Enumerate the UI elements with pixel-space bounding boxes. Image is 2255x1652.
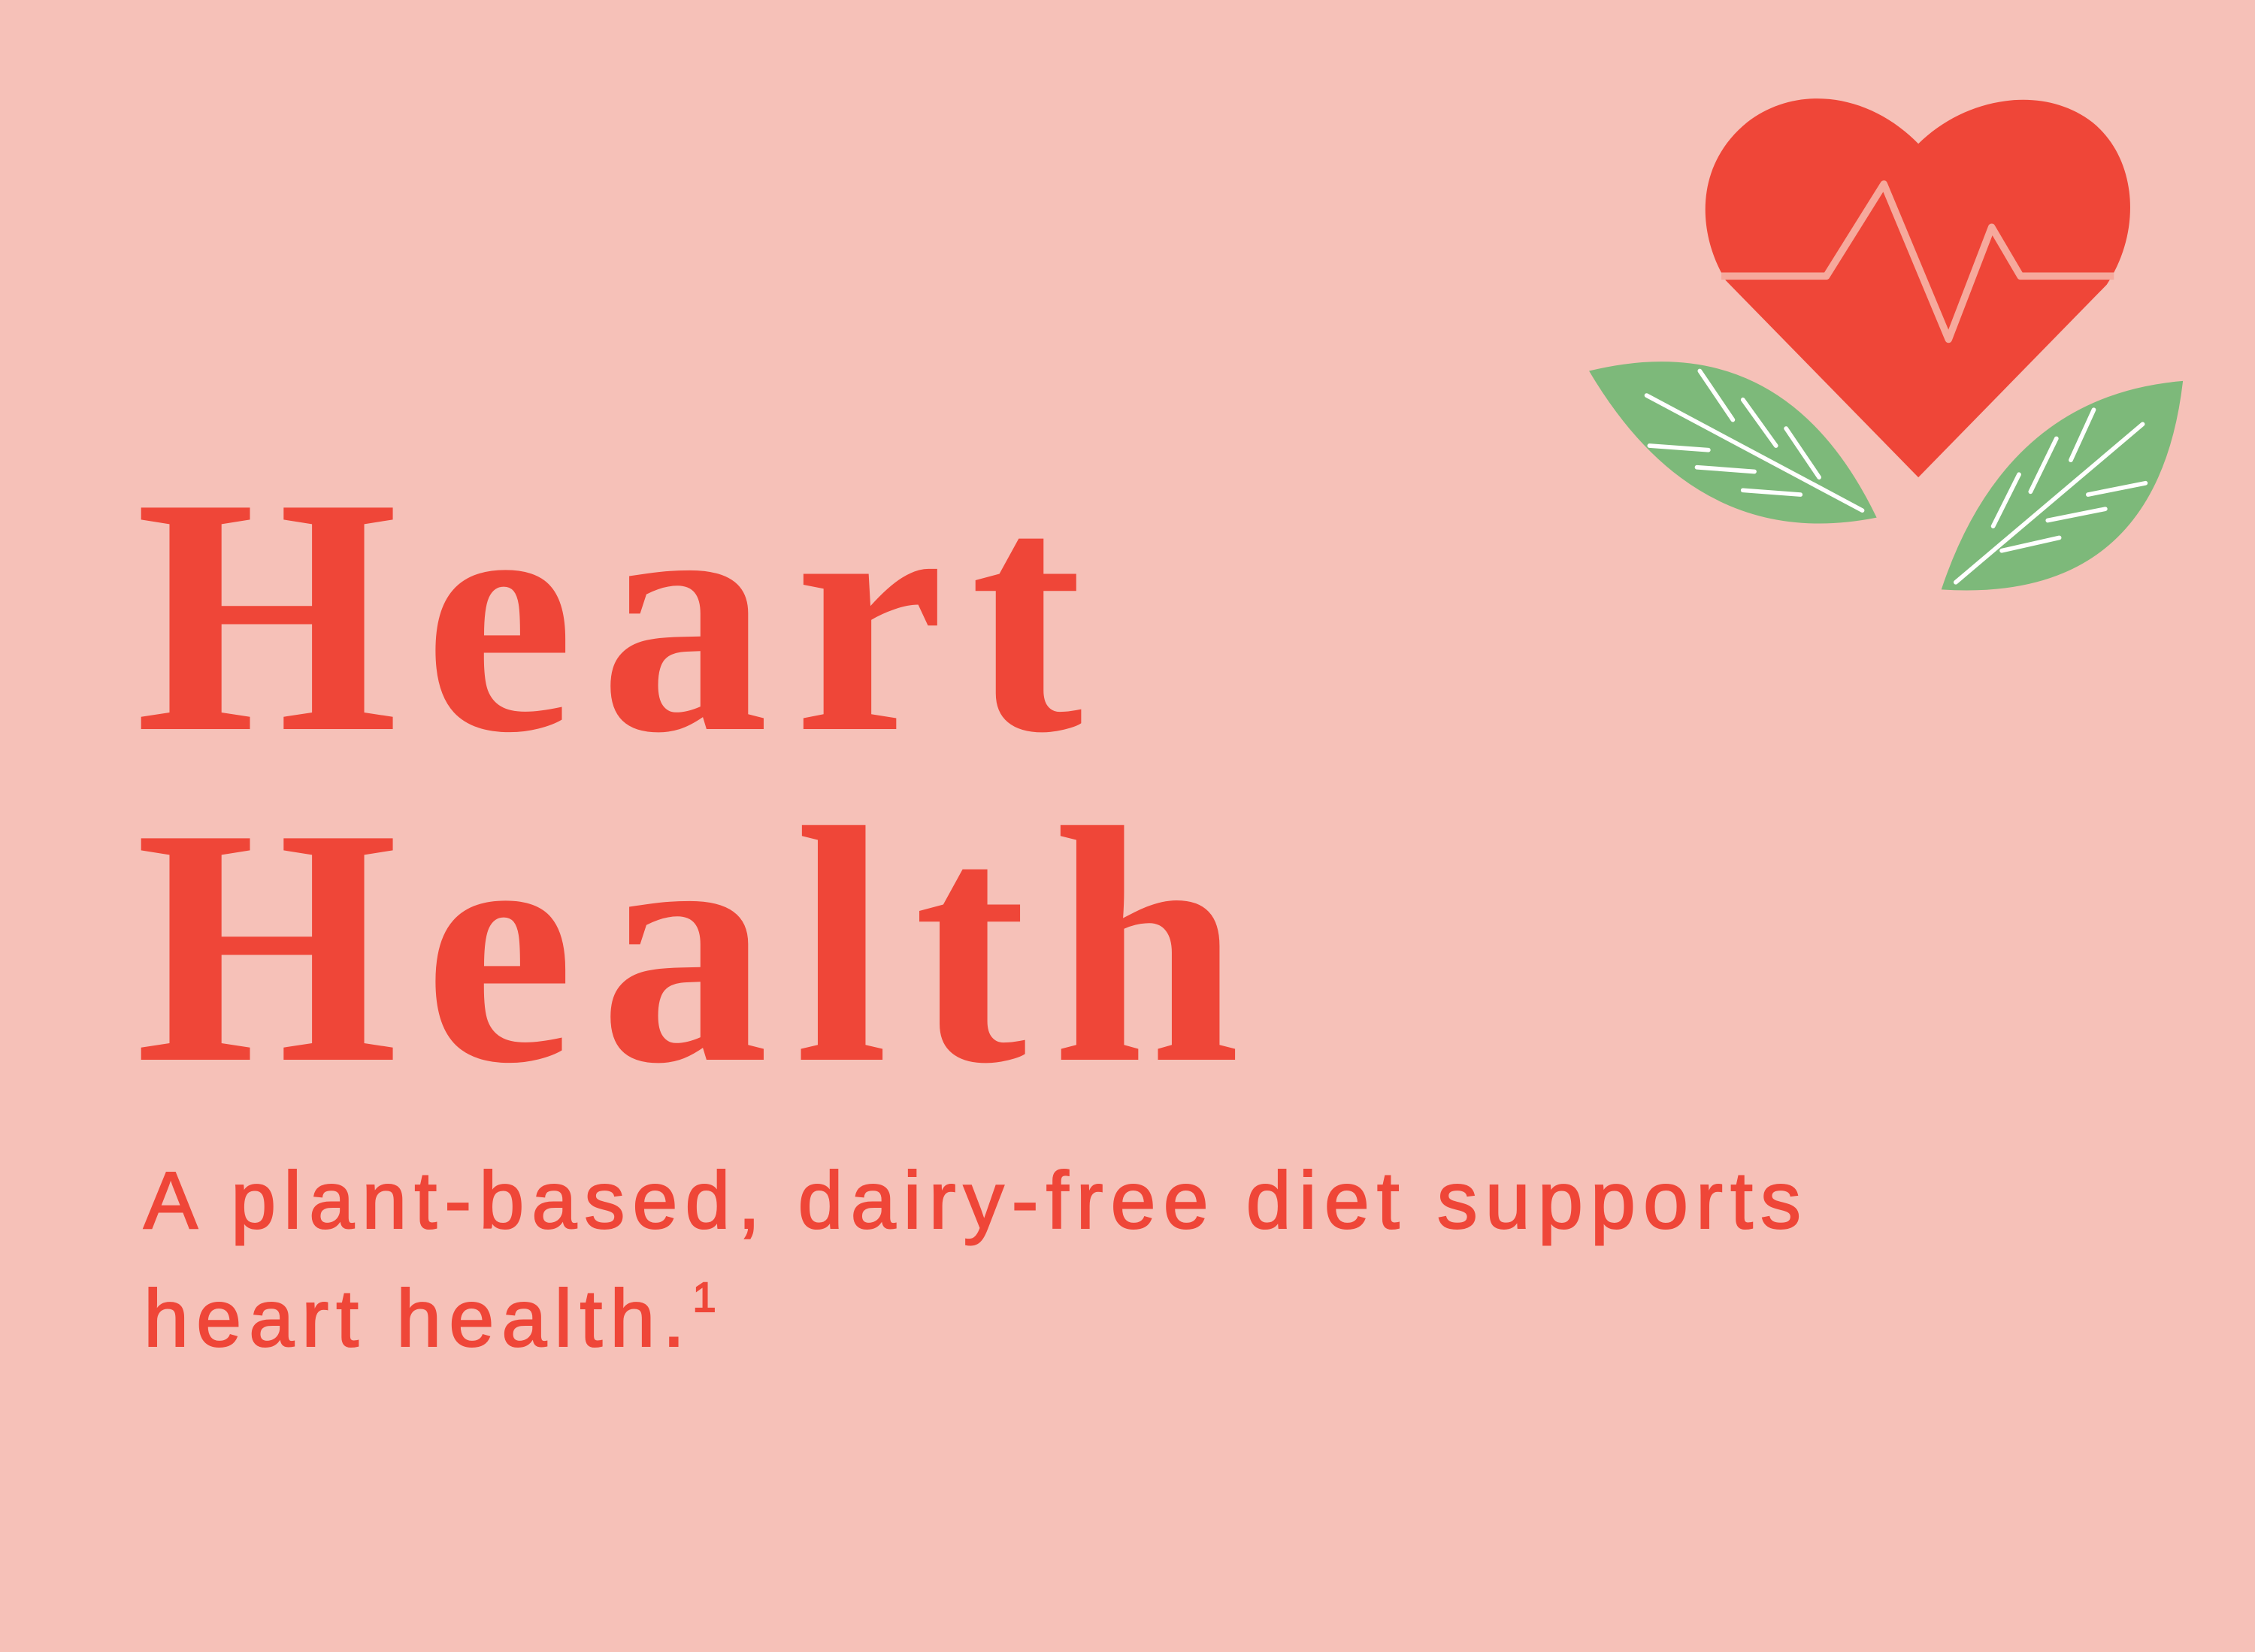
subtitle line 2: heart health.1: [144, 1272, 724, 1363]
subtitle line 1: A plant-based, dairy-free diet supports: [144, 1154, 1809, 1245]
title: Heart: Heart: [135, 428, 1108, 803]
icon: heart: [1706, 98, 2130, 477]
icon: right leaf: [1942, 381, 2183, 590]
icon: left leaf: [1589, 362, 1877, 524]
title: Health: Health: [135, 759, 1266, 1133]
